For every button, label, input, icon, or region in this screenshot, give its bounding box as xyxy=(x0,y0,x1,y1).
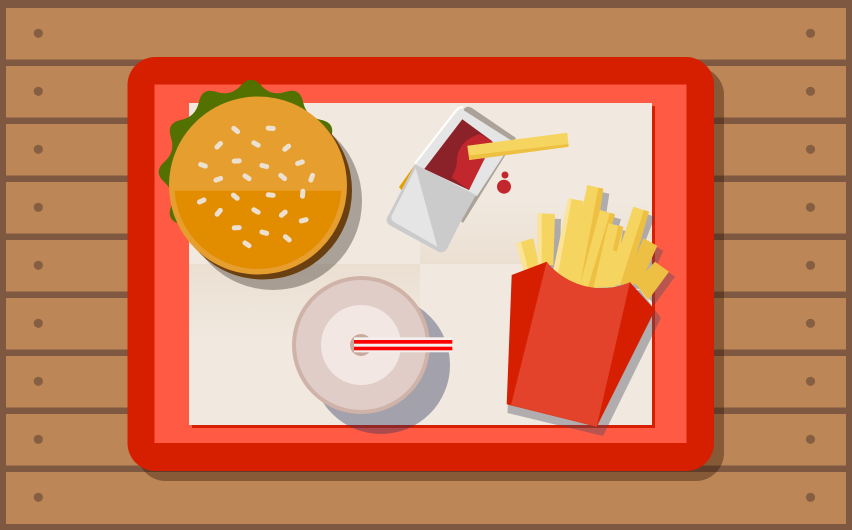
fry 1 xyxy=(516,238,540,272)
cup shadow xyxy=(312,296,450,434)
packet body xyxy=(416,111,510,194)
fry 8 xyxy=(625,238,657,285)
striped straw xyxy=(354,337,452,352)
cup lid xyxy=(296,280,426,410)
french fries xyxy=(507,185,675,436)
straw hole xyxy=(350,334,372,356)
bun underside xyxy=(174,102,352,280)
packet flap xyxy=(387,164,476,252)
fry 2 xyxy=(538,213,555,265)
burger shadow xyxy=(184,112,362,290)
red tray xyxy=(128,57,714,471)
tray shadow xyxy=(138,67,724,481)
ketchup drops xyxy=(497,172,511,194)
ketchup bright xyxy=(452,134,493,190)
bun lower shade xyxy=(174,190,342,269)
fry 6 xyxy=(593,223,623,288)
packet highlight edge xyxy=(415,107,463,164)
fry 5 xyxy=(580,210,615,288)
single fry on packet xyxy=(467,133,569,160)
ketchup dark xyxy=(424,119,492,190)
stray fry behind packet xyxy=(399,166,414,193)
paper liner xyxy=(189,103,655,428)
fry 4 xyxy=(565,185,603,288)
lettuce xyxy=(159,80,343,250)
drink cup xyxy=(292,276,452,434)
sesame seeds xyxy=(196,125,316,249)
fries box xyxy=(507,262,655,427)
fries shadow xyxy=(508,190,675,436)
fry 3 xyxy=(553,198,583,285)
packet shadow xyxy=(440,107,516,223)
ketchup packet xyxy=(387,107,569,252)
cup rim xyxy=(292,276,430,414)
fry 9 xyxy=(635,262,669,300)
bun top xyxy=(169,96,347,274)
fry 7 xyxy=(607,207,649,287)
burger xyxy=(159,80,362,290)
lid centre xyxy=(321,305,401,385)
